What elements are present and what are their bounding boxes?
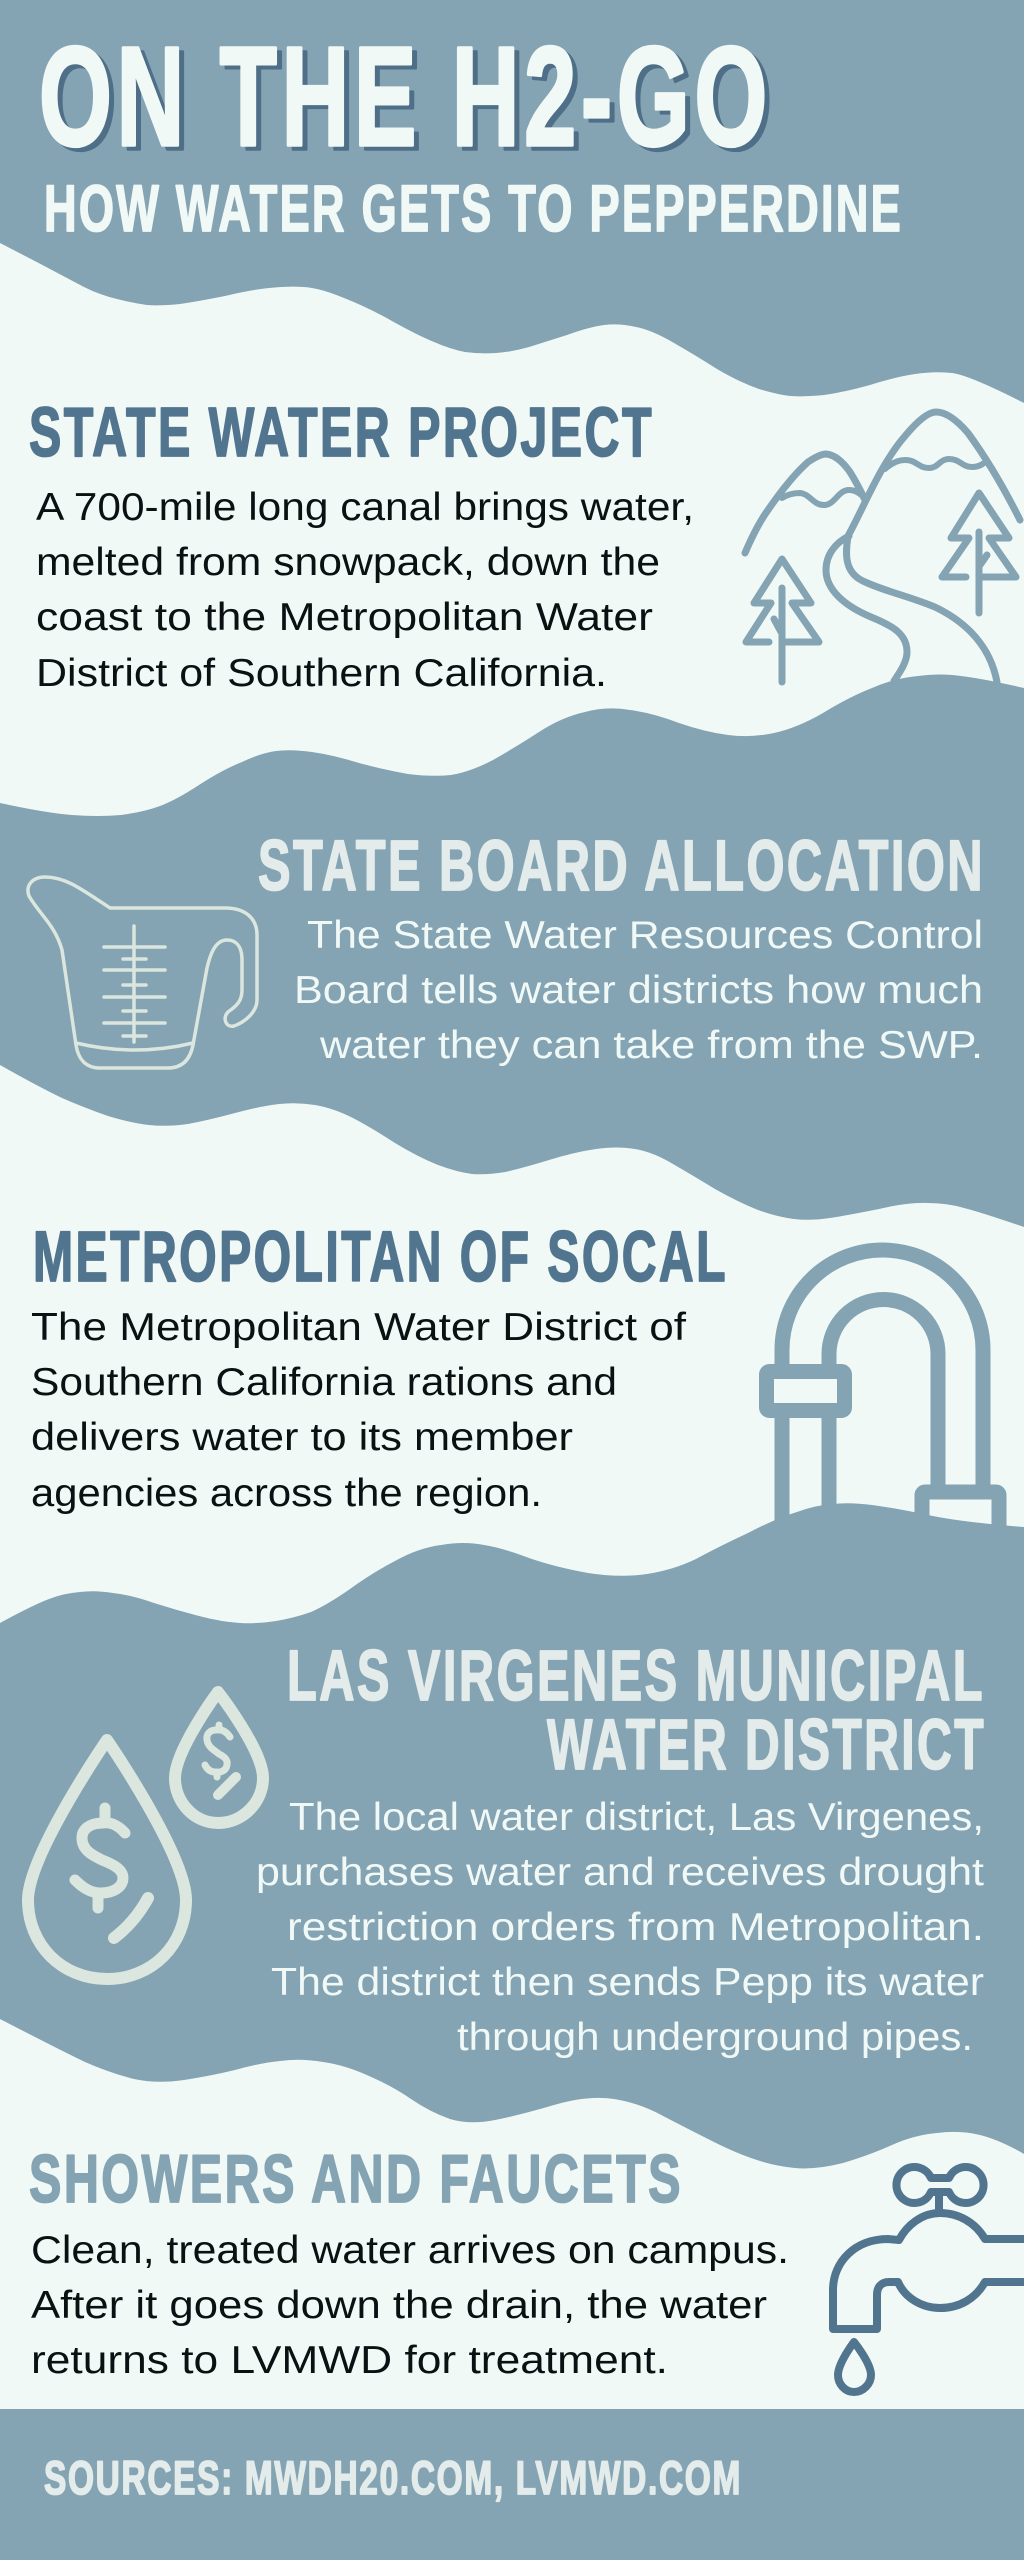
heading: SHOWERS AND FAUCETS: [29, 2141, 683, 2217]
panel: las virgenes municipal water district: [0, 1503, 1024, 2175]
body text: Southern California rations and: [31, 1361, 617, 1404]
body text: delivers water to its member: [31, 1416, 573, 1459]
body text: melted from snowpack, down the: [36, 541, 660, 584]
body text: District of Southern California.: [36, 652, 607, 695]
body text: After it goes down the drain, the water: [31, 2284, 767, 2327]
icon: faucet: [833, 2167, 1024, 2392]
body text: The local water district, Las Virgenes,: [289, 1796, 984, 1839]
body text: [31, 2229, 789, 2382]
icon: large water drop with dollar sign: [28, 1740, 186, 1979]
panel: showers and faucets: [0, 2019, 1024, 2410]
body text: The Metropolitan Water District of: [31, 1306, 686, 1349]
footer band: [0, 2409, 1024, 2560]
panel: state water project: [0, 243, 1024, 818]
body text: restriction orders from Metropolitan.: [287, 1906, 984, 1949]
body text: The district then sends Pepp its water: [271, 1961, 984, 2004]
body text: [256, 1796, 984, 2059]
sources: SOURCES: MWDH20.COM, LVMWD.COM: [44, 2451, 742, 2504]
icon: pipe: [766, 1250, 999, 1560]
panel: metropolitan of socal: [0, 1065, 1024, 1625]
icon: mountains, trees and river: [745, 412, 1020, 682]
body text: Clean, treated water arrives on campus.: [31, 2229, 789, 2272]
body text: returns to LVMWD for treatment.: [31, 2339, 668, 2382]
icon: measuring cup: [28, 877, 257, 1068]
heading: [287, 1637, 986, 1785]
body text: [36, 486, 694, 695]
body text: coast to the Metropolitan Water: [36, 596, 653, 639]
body text: The State Water Resources Control: [307, 914, 983, 957]
icon: small water drop with dollar sign: [175, 1692, 263, 1823]
body text: water they can take from the SWP.: [319, 1024, 983, 1067]
body text: [294, 914, 983, 1067]
heading: STATE WATER PROJECT: [29, 393, 654, 471]
body text: [31, 1306, 686, 1515]
panel: state board allocation: [0, 674, 1024, 1230]
body text: purchases water and receives drought: [256, 1851, 984, 1894]
body text: Board tells water districts how much: [294, 969, 983, 1012]
body text: A 700-mile long canal brings water,: [36, 486, 694, 529]
body text: agencies across the region.: [31, 1472, 542, 1515]
body text: through underground pipes.: [457, 2016, 973, 2059]
